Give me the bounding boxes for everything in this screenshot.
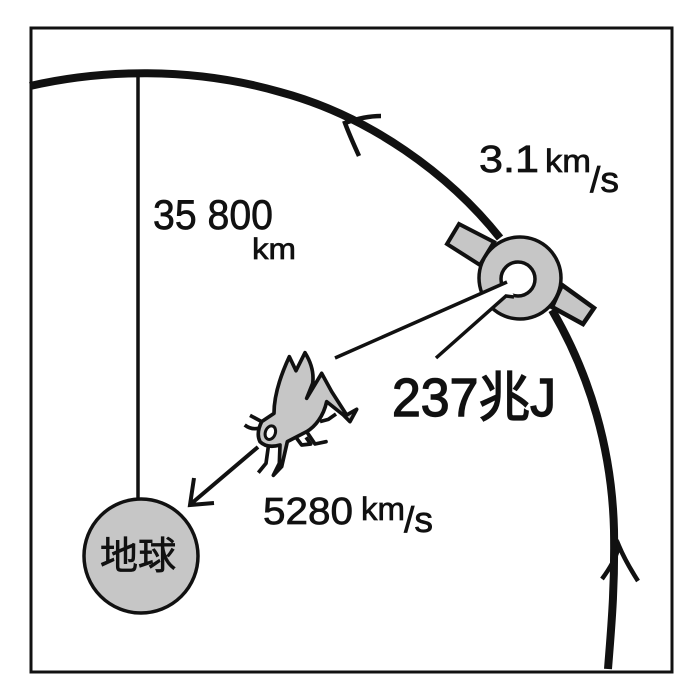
- insect far legs: [258, 414, 336, 473]
- insect speed label: [263, 491, 433, 540]
- altitude line: [136, 72, 140, 500]
- satellite speed label: /s: [590, 159, 619, 200]
- orbit arc: [30, 73, 614, 669]
- insect eye: [263, 424, 277, 441]
- Earth label: 地球: [100, 536, 176, 578]
- satellite core: [501, 262, 535, 296]
- satellite body: [479, 237, 561, 319]
- altitude label: [153, 191, 296, 266]
- satellite speed label: 3.1: [479, 139, 539, 181]
- insect body: [258, 353, 357, 475]
- insect speed label: /s: [404, 499, 433, 540]
- insect antennae: [245, 415, 262, 429]
- solar panel left: [447, 224, 494, 265]
- solar panel right: [552, 285, 594, 324]
- arrow: orbit direction bottom: [602, 546, 638, 581]
- satellite speed label: km: [545, 143, 591, 179]
- energy label: 237兆J: [392, 368, 556, 428]
- satellite: [447, 224, 594, 324]
- satellite speed label: [479, 139, 619, 200]
- altitude label: 35 800: [153, 191, 273, 238]
- insect speed label: km: [361, 491, 405, 527]
- arrow: orbit direction top: [345, 116, 381, 156]
- insect: [245, 353, 357, 475]
- altitude label: km: [252, 233, 296, 266]
- insect speed label: 5280: [263, 491, 353, 533]
- arrow: insect trajectory: [190, 447, 258, 505]
- energy beam: [335, 282, 514, 358]
- Earth: [84, 499, 198, 613]
